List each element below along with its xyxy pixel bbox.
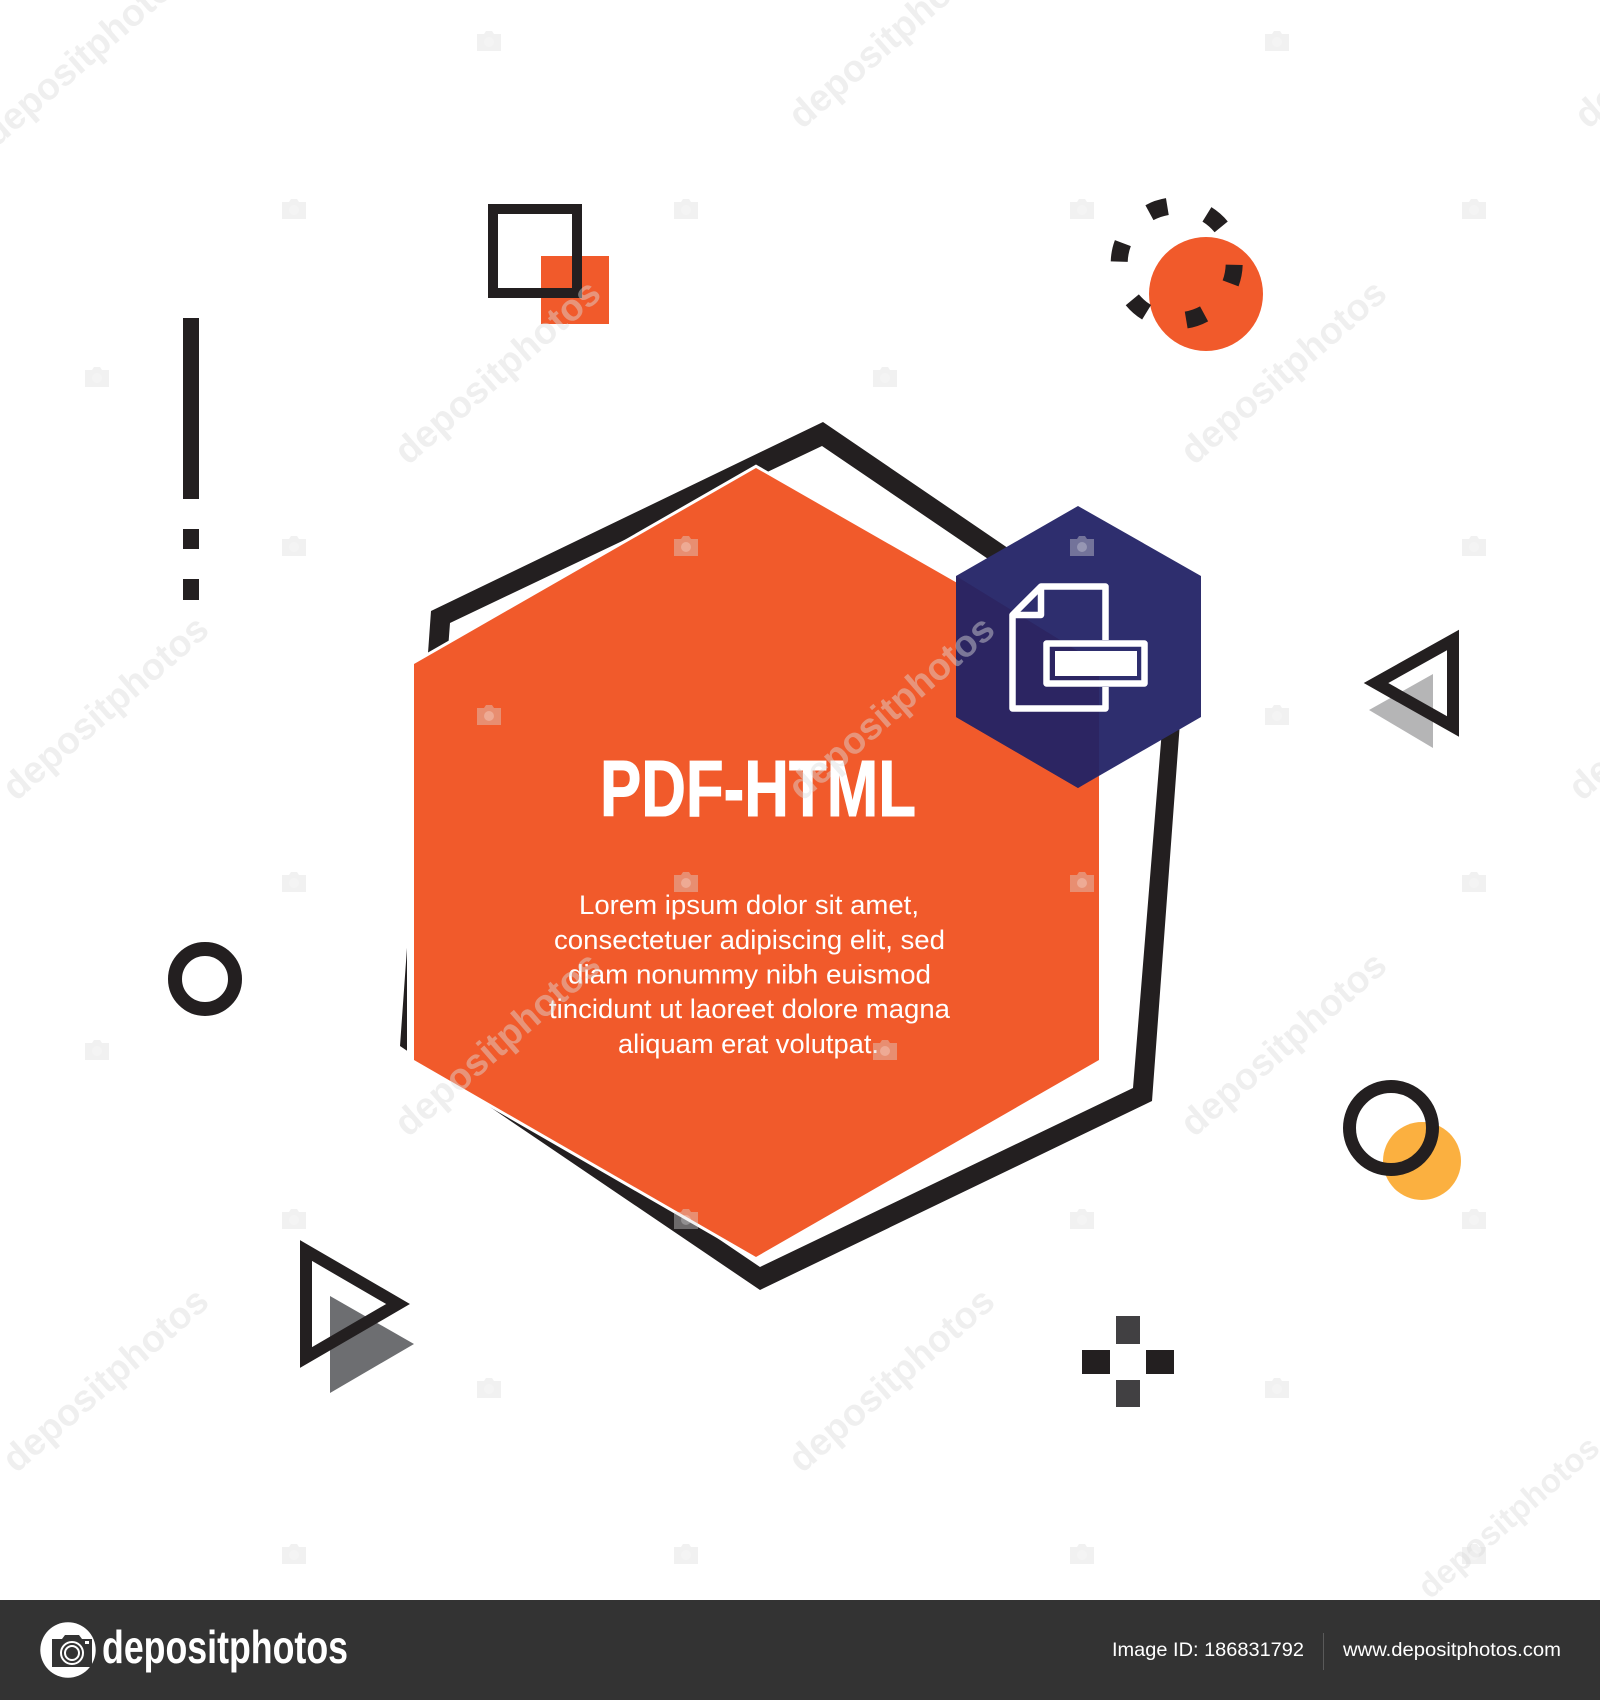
watermark layer: depositphotos bbox=[0, 1279, 216, 1480]
body text: Lorem ipsum dolor sit amet, bbox=[579, 890, 919, 920]
footer bar bbox=[0, 1600, 1600, 1700]
footer logo icon: camera bbox=[40, 1622, 96, 1678]
body text: tincidunt ut laoreet dolore magna bbox=[549, 994, 950, 1024]
body text: consectetuer adipiscing elit, sed bbox=[554, 925, 945, 955]
navy hexagon badge bbox=[956, 506, 1201, 788]
decoration: orange circle with dashed ring bbox=[1118, 204, 1263, 351]
watermark layer: depositphotos bbox=[386, 943, 608, 1144]
decoration: plus of four squares bbox=[1082, 1316, 1174, 1407]
decoration: left ring bbox=[175, 949, 235, 1009]
watermark layer: depositphotos bbox=[0, 607, 216, 808]
black hexagon outline bbox=[400, 422, 1184, 1290]
decoration: right triangle with grey shadow bbox=[1369, 640, 1453, 748]
decoration: vertical dashed bar bbox=[183, 318, 199, 600]
watermark camera marks bbox=[85, 31, 1486, 1564]
decoration: ring with yellow circle bbox=[1350, 1086, 1461, 1200]
icon: PDF document with HTML box bbox=[1012, 586, 1144, 708]
watermark layer: depositphotos bbox=[780, 607, 1002, 808]
orange hexagon panel bbox=[407, 468, 1099, 1257]
watermark layer: depositphotos bbox=[1172, 943, 1394, 1144]
body text: aliquam erat volutpat. bbox=[618, 1029, 879, 1059]
watermark layer: depositphotos bbox=[1172, 271, 1394, 472]
footer image id: Image ID: 186831792 bbox=[1112, 1639, 1304, 1661]
watermark layer: depositphotos bbox=[780, 1279, 1002, 1480]
footer divider bbox=[1323, 1633, 1324, 1670]
watermark layer: depositphotos bbox=[386, 271, 608, 472]
decoration: lower-left triangle with grey shadow bbox=[306, 1250, 414, 1393]
body text bbox=[549, 890, 950, 1059]
title: PDF-HTML bbox=[600, 744, 916, 833]
decoration: black square with orange square bbox=[493, 209, 609, 324]
footer logo wordmark: depositphotos bbox=[102, 1621, 348, 1673]
footer website: www.depositphotos.com bbox=[1342, 1639, 1561, 1661]
body text: diam nonummy nibh euismod bbox=[568, 960, 931, 990]
